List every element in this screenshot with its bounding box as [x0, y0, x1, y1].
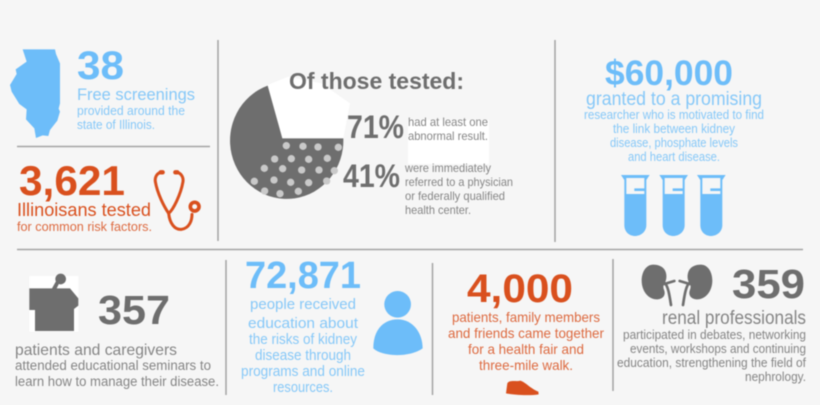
text: referred to a physician: or federally qualified [405, 189, 505, 203]
text: seminars description: attended educational seminars to [15, 358, 211, 373]
icon: shoe [506, 381, 539, 395]
chart: pie chart [230, 77, 350, 199]
heading: free screenings: Free screenings [77, 85, 195, 104]
icon: stethoscope [155, 172, 199, 229]
text: provided around the state: state of Illinois. [77, 117, 155, 132]
text: education description: the risks of kidney [249, 331, 357, 348]
panel: education [241, 255, 423, 396]
icon: Illinois map [10, 49, 60, 138]
text: for common risk factors: for common risk factors. [17, 219, 152, 234]
heading: patients and caregivers: patients and caregivers [15, 342, 177, 359]
panel: of those tested [230, 68, 513, 217]
text: education description: education about [248, 315, 359, 332]
text: referred to a physician: were immediately [404, 161, 491, 175]
number: 38: 38 [77, 44, 124, 88]
stat: 41%: 41% [343, 158, 400, 194]
number: 3,621: 3,621 [19, 157, 125, 204]
icon: test tube 3 [697, 175, 726, 236]
text: had at least one abnormal result [408, 115, 488, 143]
text: referred to a physician: health center. [405, 203, 471, 217]
text: provided around the state: provided around the [77, 103, 185, 118]
text: researcher description: and heart disease. [628, 149, 720, 164]
text: professionals description: education, strengthening the field of [617, 355, 806, 370]
text: education description: people received [250, 296, 356, 313]
icon: right kidney [680, 265, 712, 305]
text: professionals description: participated in debates, networking [623, 327, 806, 342]
text: health fair description: and friends came together [448, 325, 604, 341]
icon: podium [29, 274, 78, 332]
heading: granted to a promising: granted to a promising [586, 89, 762, 110]
icon: test tube 1 [621, 175, 650, 236]
text: education description: programs and online [241, 363, 365, 380]
text: professionals description: nephrology. [745, 369, 806, 384]
stat: 71%: 71% [347, 109, 404, 145]
icon: kidneys [642, 265, 712, 305]
panel: free screenings [10, 44, 195, 138]
panel: Illinoisans tested [17, 157, 199, 234]
text: referred to a physician [404, 161, 513, 217]
icon: test tubes [621, 175, 726, 236]
icon: test tube 2 [659, 175, 688, 236]
text: had at least one abnormal result: had at least one [408, 115, 488, 129]
text: provided around the state [77, 103, 185, 132]
text: referred to a physician: referred to a physician [405, 175, 513, 189]
text: health fair description: for a health fair and [468, 341, 584, 357]
text: education description: resources. [273, 379, 333, 396]
panel: seminars [15, 274, 219, 389]
heading: of those tested: Of those tested: [289, 68, 464, 94]
number: 359: 359 [732, 261, 805, 307]
text: education description [241, 296, 365, 396]
white patch behind 71% text [408, 120, 489, 164]
number: $60,000: $60,000 [605, 54, 733, 93]
text: researcher description: disease, phosphate levels [610, 135, 738, 150]
panel: renal professionals [617, 261, 806, 384]
pie: dark slices [230, 86, 343, 199]
pie: white wedge [268, 77, 350, 138]
number: 357: 357 [98, 287, 170, 333]
panel: health fair [448, 267, 604, 395]
icon: left kidney [642, 265, 674, 305]
text: seminars description [15, 358, 219, 389]
text: researcher description: researcher who is motivated to find [584, 107, 764, 122]
text: health fair description: patients, family members [452, 309, 600, 325]
text: had at least one abnormal result: abnormal result. [408, 129, 488, 143]
text: researcher description: the link between kidney [613, 121, 735, 136]
icon: person [373, 291, 423, 355]
text: researcher description [584, 107, 764, 164]
panel: research grant [584, 54, 764, 236]
text: education description: disease through [255, 347, 351, 364]
text: seminars description: learn how to manage their disease. [15, 374, 219, 389]
pie: dot pattern [251, 142, 342, 197]
text: health fair description [448, 309, 604, 373]
text: professionals description [617, 327, 806, 384]
number: 4,000: 4,000 [467, 267, 573, 311]
text: health fair description: three-mile walk. [479, 357, 573, 373]
text: professionals description: events, workshops and continuing [630, 341, 806, 356]
heading: renal professionals: renal professionals [662, 308, 806, 329]
heading: Illinoisans tested: Illinoisans tested [17, 200, 151, 220]
number: 72,871: 72,871 [245, 255, 361, 297]
